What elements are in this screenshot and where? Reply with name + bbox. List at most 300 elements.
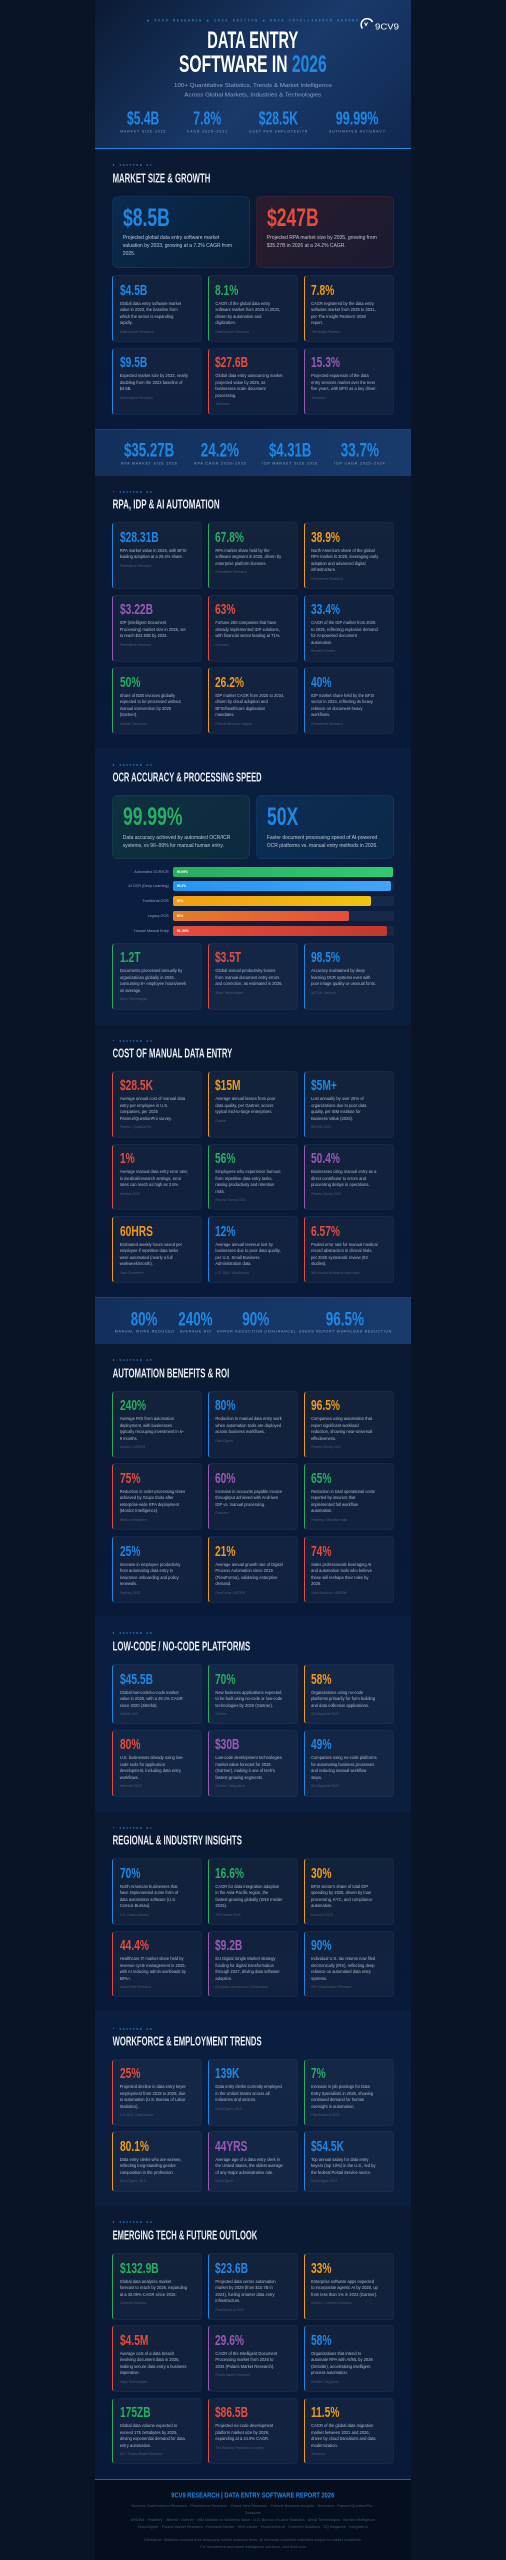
description (120, 1884, 201, 1910)
value: 26.2% (215, 675, 244, 691)
card: $9.5B (112, 348, 202, 415)
description: were automated (nearly a full (120, 1255, 172, 1260)
description (215, 1169, 297, 1195)
stat: workload reduction (299, 1309, 392, 1334)
card: 7% (304, 2059, 394, 2126)
description (215, 1242, 297, 1268)
description: platforms primarily for form building (311, 1696, 375, 1701)
description: automate RPA with AI/ML by 2026 (311, 2357, 373, 2362)
source: U.S. Census Bureau (120, 1913, 149, 1917)
title: DATA ENTRY (207, 28, 298, 54)
source: Parseur / QuestionPro (120, 1125, 151, 1129)
stat: accuracy: 99.99% (336, 107, 378, 128)
source: Gartner / Docsumo (120, 722, 147, 726)
description: 2024), fueling smarter data entry (215, 2292, 275, 2297)
card: 70% (112, 1858, 202, 1925)
description: to be built using no-code or low-code (215, 1696, 282, 1701)
description (311, 693, 374, 717)
description: automation. (311, 1903, 332, 1908)
value: $132.9B (120, 2261, 158, 2277)
value: 25% (120, 1544, 140, 1560)
card: $4.5M (112, 2325, 202, 2392)
value: 44YRS (215, 2139, 248, 2155)
description: have implemented some form of (120, 1890, 178, 1895)
source: DocuClipper (215, 2179, 233, 2183)
bar: AI OCR: 99.3% (177, 884, 186, 888)
card: 175ZB (112, 2398, 202, 2464)
description: studies). (311, 1261, 327, 1266)
card: $9.2B (208, 1931, 298, 1997)
description: direct contributor to errors and (311, 1176, 366, 1181)
source: Gartner (215, 1712, 226, 1716)
description: steps. (311, 1775, 322, 1780)
value: 63% (215, 602, 236, 618)
value: 6.57% (311, 1224, 340, 1240)
description: Data entry clerks currently employed (215, 2084, 282, 2089)
source: U.S. SBA / VistaAnswer (215, 1271, 249, 1275)
description: quality, per IBM Institute for (311, 1109, 361, 1114)
value: 60HRS (120, 1224, 153, 1240)
section label: SECTION 01 (119, 163, 153, 167)
description: IDP market CAGR from 2025 to 2034, (215, 693, 284, 698)
section 09: emerging tech and future outlook (95, 2206, 411, 2479)
card: $4.5B (112, 275, 202, 342)
big card: $247B (256, 196, 394, 268)
description (215, 968, 283, 986)
bar: human manual entry: Human Manual Entry (134, 929, 169, 933)
description: OCR platforms vs. manual entry methods in 2026. (267, 843, 378, 849)
section heading: WORKFORCE & EMPLOYMENT TRENDS (113, 2034, 262, 2048)
description: entry services market over the next (311, 380, 375, 385)
description: CAGR of the global data entry (215, 301, 270, 306)
description: learning OCR systems even with (311, 975, 370, 980)
description (311, 373, 377, 391)
source: IRS / DataHorizon Research (311, 1985, 351, 1989)
value: $27.6B (215, 355, 248, 371)
description: CAGR for data integration adoption (215, 1884, 279, 1889)
description: per The Insight Partners' 2026 (311, 314, 366, 319)
description: Data accuracy achieved by automated OCR/ICR (123, 835, 230, 841)
stat: cost per employee: $28.5K (259, 107, 298, 128)
source: Artsyl Technologies (120, 997, 147, 1001)
description: RPA market value in 2025, with BFSI (120, 548, 187, 553)
description (215, 301, 280, 325)
card: $23.6B (208, 2253, 298, 2320)
description (311, 1884, 393, 1910)
description: market value forecast for 2026 (215, 1762, 271, 1767)
value: $3.22B (120, 602, 153, 618)
value: $86.5B (215, 2405, 248, 2421)
value: 90% (311, 1938, 332, 1954)
card: 96.5% (304, 1391, 394, 1458)
description: platform market size by 2029, (215, 2430, 269, 2435)
section heading: REGIONAL & INDUSTRY INSIGHTS (113, 1834, 242, 1848)
card: 56% (208, 1144, 298, 1210)
description: enterprise platform licenses. (215, 561, 267, 566)
description: implemented full workflow (311, 1502, 358, 1507)
source: Gartner (215, 1119, 226, 1123)
disclaimer: Disclaimer: Statistics sourced from third-party market research firms. All forecasts represent estimates subject to market conditions. (144, 2538, 362, 2542)
card: 33.4% (304, 595, 394, 662)
value: 58% (311, 2333, 332, 2349)
source: Parseur Survey 2025 (311, 1445, 341, 1449)
source: Gartner / Coherent Solutions (311, 2301, 352, 2305)
description: Entry Specialists in 2025, showing (311, 2091, 373, 2096)
subtitle (174, 83, 332, 98)
source: SNS Insider 2025 (215, 1913, 240, 1917)
description: projected value by 2025, as (215, 380, 265, 385)
description (120, 620, 186, 638)
value: 80.1% (120, 2139, 149, 2155)
description: processing delays in operations. (311, 1182, 370, 1187)
description: achieved by Grupo Éxito after (120, 1495, 174, 1500)
source: Index.dev 2025 (120, 1784, 142, 1788)
footer title: 9CV9 RESEARCH | DATA ENTRY SOFTWARE REPORT 2026 (171, 2493, 334, 2500)
description: imperative. (120, 2370, 140, 2375)
description: Projected RPA market size by 2035, growing from (267, 235, 377, 241)
card: 80% (112, 1730, 202, 1797)
value: 56% (215, 1151, 236, 1167)
description: CAGR of the IDP market from 2026 (311, 620, 375, 625)
stat: cost per employee: COST PER EMPLOYEE/YR (249, 130, 308, 134)
value: 30% (311, 1866, 332, 1882)
bar: traditional OCR: 90% (177, 899, 183, 903)
description: technologies by 2026 (Gartner). (215, 1703, 273, 1708)
card: 6.57% (304, 1216, 394, 1283)
value: $5M+ (311, 1078, 337, 1094)
description (215, 1416, 297, 1436)
logo: 9CV9 (361, 19, 400, 32)
source: Gartner / Integrate.io (215, 1784, 245, 1788)
description: making secure data entry a business (120, 2364, 186, 2369)
card: 60HRS (112, 1216, 202, 1283)
description (120, 548, 187, 559)
bar: automated OCR/ICR (134, 867, 394, 877)
description: RPA market in 2025, leveraging early (311, 554, 378, 559)
value: 175ZB (120, 2405, 150, 2421)
subtitle: Across Global Markets, Industries & Technologies (184, 92, 322, 98)
description: Process Automation since 2019 (215, 1568, 273, 1573)
description (215, 1562, 297, 1588)
description: rates can reach as high as 3.6%. (120, 1182, 179, 1187)
description: and automation tools who believe (311, 1568, 372, 1573)
stat: average ROI: AVERAGE ROI (180, 1330, 211, 1334)
card: $28.5K (112, 1071, 202, 1138)
value: 12% (215, 1224, 236, 1240)
description: organizations globally in 2026, (120, 975, 175, 980)
description: Increase in job postings for Data (311, 2084, 370, 2089)
description: processing. (215, 393, 236, 398)
card: 16.6% (208, 1858, 298, 1925)
description: and data collection applications. (311, 1703, 369, 1708)
source: Precedence Research (311, 577, 343, 581)
description (311, 1956, 393, 1982)
description: data quality, per Gartner, across (215, 1103, 273, 1108)
value: $8.5B (123, 204, 170, 232)
value: 70% (120, 1866, 140, 1882)
description: BFSI/healthcare digitisation (215, 706, 265, 711)
description: IDP (Intelligent Document (120, 620, 166, 625)
description: Enterprise software apps expected (311, 2279, 374, 2284)
stat: manual work reduced (115, 1309, 174, 1334)
description: organizations due to poor data (311, 1103, 366, 1108)
description: employee if repetitive data tasks (120, 1248, 178, 1253)
section label: SECTION 05 (119, 1358, 153, 1362)
description: to reach $43.92B by 2034. (120, 633, 168, 638)
source: Precedence Research (215, 570, 247, 574)
card: 26.2% (208, 667, 298, 734)
card: 8.1% (208, 275, 298, 342)
section heading: RPA, IDP & AI AUTOMATION (113, 498, 220, 512)
description: electronically (IRS), reflecting deep (311, 1963, 375, 1968)
section label: SECTION 04 (119, 1039, 153, 1043)
source: Precedence Research (120, 643, 151, 647)
description: reliance on document-heavy (311, 706, 363, 711)
description: Global low-code/no-code market (120, 1690, 179, 1695)
value: 40% (311, 675, 332, 691)
description: Faster document processing speed of AI-powered (267, 835, 377, 841)
card: $54.5K (304, 2131, 394, 2192)
description: Pooled error rate for manual medical (311, 1242, 378, 1247)
description: process automation. (311, 2370, 348, 2375)
description: Reduction in total operational costs (311, 1489, 375, 1494)
source: The Business Research Company (215, 2446, 264, 2450)
value: 33.4% (311, 602, 340, 618)
source: Deloitte / SkyQuest (311, 2380, 338, 2384)
bar: legacy OCR: 80% (177, 914, 183, 918)
description: 50%+. (120, 1976, 131, 1981)
description: record abstraction in clinical trials, (311, 1248, 373, 1253)
description: (Deloitte), accelerating intelligent (311, 2364, 370, 2369)
description: report. (311, 320, 323, 325)
card: 7.8% (304, 275, 394, 342)
description: when automation tools are deployed (215, 1423, 281, 1428)
big card: $8.5B (112, 196, 250, 268)
description: software segment in 2025, driven by (215, 554, 281, 559)
description (311, 2279, 393, 2298)
source: DataHorizzon Research (215, 330, 249, 334)
card: 58% (304, 1664, 394, 1724)
description: forecast to reach by 2026, expanding (120, 2285, 187, 2290)
source: Technavio (311, 396, 326, 400)
description: from less than 1% in 2024 (Gartner). (311, 2292, 377, 2297)
description (120, 1416, 201, 1443)
description: doubling from the 2023 baseline of (120, 380, 183, 385)
description: to automation (U.S. Bureau of Labor (120, 2097, 185, 2102)
value: 58% (311, 1672, 332, 1688)
description: Organizations that intend to (311, 2351, 361, 2356)
description (215, 693, 284, 717)
description: effectiveness. (311, 1436, 336, 1441)
source: Invensis 2025 (120, 1192, 139, 1196)
description: North America's share of the global (311, 548, 375, 553)
card: 63% (208, 595, 298, 662)
value: 70% (215, 1672, 236, 1688)
section 03: OCR accuracy and processing speed (95, 748, 411, 1025)
title: SOFTWARE IN 2026 (179, 52, 327, 78)
section heading: MARKET SIZE & GROWTH (113, 171, 210, 185)
description: to 2035, reflecting explosive demand (311, 627, 378, 632)
description (215, 2084, 297, 2104)
value: $3.5T (215, 950, 242, 966)
description: keyers (top 10%) in the U.S., led by (311, 2163, 375, 2168)
source: IDC / Polaris Market Research (120, 2452, 163, 2456)
stat: CAGR: 7.8% (193, 107, 221, 128)
card: $132.9B (112, 2253, 202, 2320)
section 06: low-code and no-code platforms (95, 1616, 411, 1812)
source: Jitterbit 2025 (120, 1712, 138, 1716)
card: 44.4% (112, 1931, 202, 1997)
section label: SECTION 06 (119, 1631, 153, 1635)
description: $35.27B in 2026 at a 24.2% CAGR. (267, 243, 346, 249)
value: 67.8% (215, 530, 244, 546)
description: Average cost of a data breach (120, 2351, 174, 2356)
value: 240% (120, 1398, 146, 1414)
description (267, 835, 378, 849)
description: reliance on automated data entry (311, 1969, 371, 1974)
description: digitization. (215, 320, 236, 325)
description: consuming 8+ employee hours/week (120, 981, 186, 986)
section label: SECTION 07 (119, 1826, 153, 1830)
source: IBM IBV 2026 (311, 1125, 331, 1129)
card: 29.6% (208, 2325, 298, 2392)
value: 11.5% (311, 2405, 339, 2421)
description: Sales professionals leveraging AI (311, 1562, 371, 1567)
value: 80% (120, 1737, 140, 1753)
value: $4.5M (120, 2333, 148, 2349)
description: driven by cloud transitions and data (311, 2436, 375, 2441)
description: driving exponential demand for data (120, 2436, 185, 2441)
description: RPA market share held by the (215, 548, 269, 553)
card: 49% (304, 1730, 394, 1797)
description (215, 1884, 297, 1910)
source: Docsumo (215, 643, 229, 647)
description: renewals. (120, 1581, 137, 1586)
value: 21% (215, 1544, 236, 1560)
description: New business applications expected (215, 1690, 281, 1695)
value: 49% (311, 1737, 332, 1753)
source: Feathery 2025 (120, 1591, 140, 1595)
stat: average ROI: 240% (178, 1309, 213, 1330)
value: 65% (311, 1471, 332, 1487)
bar chart: accuracy comparison (128, 867, 394, 936)
section label: SECTION 08 (119, 2027, 153, 2031)
card: 50.4% (304, 1144, 394, 1210)
description: Individual U.S. tax returns now filed (311, 1956, 375, 1961)
value: 8.1% (215, 283, 239, 299)
stat: IDP market size: $4.31B (269, 441, 311, 462)
card: 58% (304, 2325, 394, 2392)
value: 29.6% (215, 2333, 244, 2349)
section 08: workforce and employment trends (95, 2011, 411, 2206)
section 05: automation benefits and ROI (95, 1344, 411, 1616)
description: in medical/research settings, error (120, 1176, 181, 1181)
card: 50% (112, 667, 202, 734)
description (120, 1562, 201, 1588)
description: Projected no-code development (215, 2423, 273, 2428)
description: Average annual cost of manual data (120, 1096, 185, 1101)
description: at a 30.08% CAGR since 2016. (120, 2292, 177, 2297)
description: driven by cloud adoption and (215, 699, 268, 704)
card: $45.5B (112, 1664, 202, 1724)
description: insurance onboarding and policy (120, 1575, 179, 1580)
stat: IDP CAGR: IDP CAGR 2025–2034 (334, 461, 385, 465)
description: Projected global data entry software market (123, 235, 219, 241)
description: Expected market size by 2033, nearly (120, 373, 188, 378)
value: $54.5K (311, 2139, 344, 2155)
source: DataHorizzon Research (120, 330, 154, 334)
description (311, 1562, 393, 1588)
card: 1.2T (112, 943, 202, 1010)
card: 90% (304, 1931, 394, 1997)
description: typical mid-to-large enterprises. (215, 1109, 272, 1114)
stat: RPA CAGR: 24.2% (201, 441, 239, 462)
description: driven by automation and (215, 314, 261, 319)
section 04: cost of manual data entry (95, 1025, 411, 1297)
description: Parseur/QuestionPro survey. (120, 1116, 172, 1121)
description: raising productivity and retention (215, 1182, 274, 1187)
source: Fortune Business Insights (215, 722, 252, 726)
description: through 2027, driving data software (215, 1969, 280, 1974)
description (311, 2423, 393, 2449)
card: $3.22B (112, 595, 202, 662)
card: 44YRS (208, 2131, 298, 2192)
value: $4.5B (120, 283, 147, 299)
description: Global data entry outsourcing market (215, 373, 283, 378)
footer (95, 2479, 411, 2560)
value: $28.5K (120, 1078, 153, 1094)
description: Businesses citing manual entry as a (311, 1169, 376, 1174)
description: Reduction in order-processing times (120, 1489, 185, 1494)
value: 75% (120, 1471, 140, 1487)
description: CAGR of the Intelligent Document (215, 2351, 277, 2356)
section 02: RPA, IDP and AI automation (95, 476, 411, 748)
description (311, 2084, 393, 2111)
description: fastest-growing globally (SNS Insider (215, 1897, 283, 1902)
value: 80% (215, 1398, 236, 1414)
description: in the Asia-Pacific region, the (215, 1890, 268, 1895)
disclaimer: For recruitment and career intelligence solutions, visit 9cv9.com (200, 2545, 306, 2549)
stat band: automation impact (95, 1297, 411, 1344)
description: Projected expansion of the data (311, 373, 369, 378)
description: reported by insurers that (311, 1495, 355, 1500)
description: processing, KYC, and compliance (311, 1897, 373, 1902)
card: 70% (208, 1664, 298, 1724)
description (120, 301, 182, 325)
source: Technavio (311, 2452, 326, 2456)
description (311, 2157, 393, 2176)
value: 7% (311, 2066, 326, 2082)
card: 12% (208, 1216, 298, 1283)
description (120, 1755, 201, 1782)
card: 74% (304, 1536, 394, 1603)
card: 80.1% (112, 2131, 202, 2192)
description: continued demand for human (311, 2097, 364, 2102)
value: 1.2T (120, 950, 140, 966)
description: 2025. (123, 251, 135, 257)
stat: RPA CAGR: RPA CAGR 2026–2035 (194, 461, 246, 465)
description: Increase in employee productivity (120, 1562, 180, 1567)
description: risks. (215, 1189, 225, 1194)
description (311, 1489, 393, 1515)
description: Administration data. (215, 1261, 252, 1266)
stat: error reduction (217, 1309, 295, 1334)
description: the federal Postal Service sector. (311, 2170, 371, 2175)
description: for AI-powered document (311, 633, 357, 638)
description (311, 1690, 393, 1709)
source: Precedence Research (120, 564, 151, 568)
card: 67.8% (208, 522, 298, 589)
